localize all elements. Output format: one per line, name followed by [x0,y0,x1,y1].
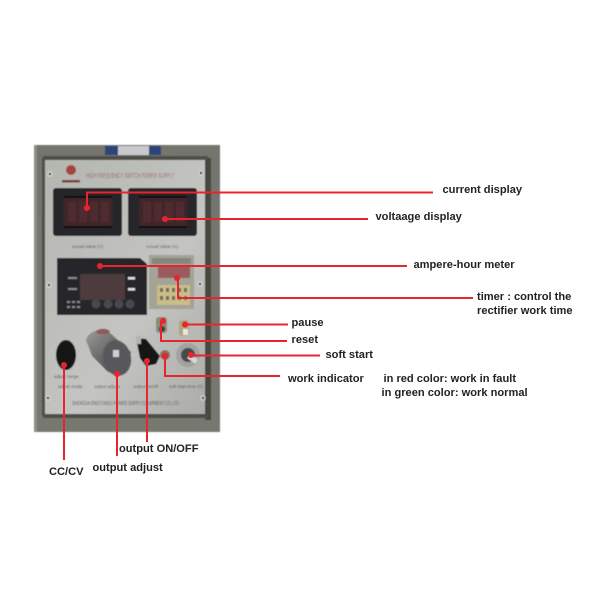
label: soft start: soft start [326,349,373,361]
leader: soft start [188,352,320,358]
work indicator lamp [160,350,170,360]
leader: voltage display [162,216,368,222]
leader: work indicator [162,353,280,377]
soft start switch [176,343,200,367]
red leader lines [61,192,473,460]
label: timer: timer : control the [477,291,571,303]
label: pause: pause [292,317,324,329]
panel text: soft start time (S) [169,384,204,389]
note: indicator colours: in green color: work normal [382,387,528,399]
label: timer: rectifier work time [477,305,573,317]
pause button [179,320,189,336]
leader: pause [182,322,288,328]
label: work indicator: work indicator [287,373,365,385]
panel text: HIGH FREQUENCY SWITCH POWER SUPPLY [86,173,174,180]
voltage meter [128,188,197,236]
ampere-hour meter [57,258,147,315]
reset button [156,317,167,333]
panel text: output on/off [133,384,159,389]
timer [149,255,194,309]
label: voltage display: voltaage display [376,211,463,223]
leader: CC/CV [61,362,67,460]
label: CC/CV: CC/CV [49,466,84,478]
output adjust knob [86,329,134,379]
model label [105,146,161,155]
label: output ON/OFF: output ON/OFF [119,443,199,455]
label: ampere-hour meter: ampere-hour meter [414,259,515,271]
panel text [54,173,204,407]
leader: output ON/OFF [144,358,150,442]
panel text: SHENGDA XINGTONGLI POWER SUPPLY EQUIPMENT CO.,LTD [72,401,179,407]
panel text: adjust range [54,374,79,379]
leader: timer [174,275,473,299]
inner plate [45,160,205,414]
leader: current display [84,192,433,211]
note: indicator colours [382,373,528,399]
screws [46,171,205,400]
panel text: Actual Value (A) [146,244,179,249]
panel text: output adjust [94,384,121,389]
label: reset: reset [292,334,318,346]
leader: output adjust [114,371,120,456]
output ON/OFF switch [136,336,160,366]
outer frame [34,145,220,432]
power supply front panel photo [34,145,220,432]
label: timer [477,291,573,317]
leader: ampere-hour meter [97,263,407,269]
label: output adjust: output adjust [92,462,163,474]
CC/CV switch [56,340,76,370]
panel text: actual value (V) [72,244,104,249]
current meter [53,188,122,236]
label: current display: current display [442,184,523,196]
logo [62,165,80,182]
note: indicator colours: in red color: work in fault [384,373,516,385]
leader: reset [160,318,287,342]
panel text: adjust mode [58,384,83,389]
